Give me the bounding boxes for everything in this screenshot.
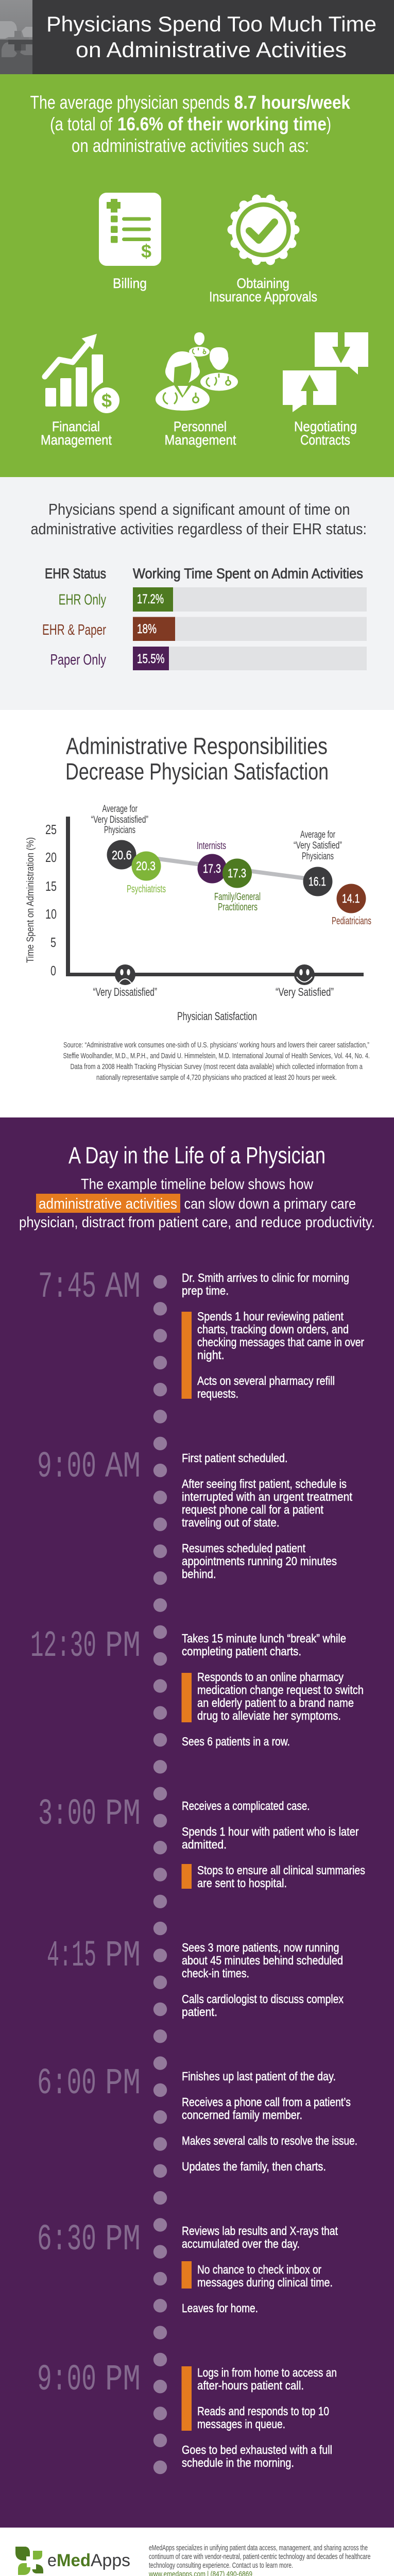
timeline entry: 7:45 AM: checking messages that came in over (197, 1335, 364, 1349)
timeline entry: 6:30 PM: No chance to check inbox or (197, 2263, 321, 2276)
icon: sad face (115, 964, 135, 985)
timeline entry: 9:00 PM: messages in queue. (197, 2417, 285, 2431)
label: financial management (41, 419, 112, 448)
icon: billing: $ (141, 241, 151, 262)
timeline entry: 3:00 PM: are sent to hospital. (197, 1876, 287, 1890)
y axis ticks: 10 (45, 906, 57, 922)
data point: pediatricians 14.1 (332, 884, 371, 927)
company description: technology consulting experience. Contact us to learn more. (149, 2561, 293, 2570)
label: financial management: Management (41, 432, 112, 448)
timeline entry: 6:00 PM: Updates the family, then charts. (182, 2160, 326, 2173)
bar chart: EHR only (59, 587, 367, 612)
y axis ticks: 20 (45, 850, 57, 865)
panel: header (0, 0, 394, 74)
timeline entry: 12:30 PM: Takes 15 minute lunch “break” while (182, 1632, 346, 1645)
scatter chart (25, 804, 371, 1023)
timeline entry: 9:00 PM: Logs in from home to access an (197, 2366, 337, 2379)
timeline entry: 9:00 PM: schedule in the morning. (182, 2456, 294, 2469)
timeline entry: 12:30 PM: Sees 6 patients in a row. (182, 1735, 290, 1748)
timeline entry: 7:45 AM: Dr. Smith arrives to clinic for morning (182, 1271, 349, 1284)
timeline entry: 7:45 AM: charts, tracking down orders, and (197, 1323, 349, 1336)
heading: A Day in the Life of a Physician (68, 1142, 326, 1168)
timeline entry: 4:15 PM (47, 1936, 344, 2019)
intro text: 16.6% of their working time (117, 113, 327, 134)
timeline entry: 7:45 AM: requests. (197, 1387, 238, 1400)
panel: physician satisfaction (0, 710, 394, 1117)
timeline entry: 9:00 AM: First patient scheduled. (182, 1451, 287, 1465)
timeline entry: 3:00 PM: Receives a complicated case. (182, 1799, 310, 1812)
icon: financial management: $ (101, 390, 112, 411)
heading: Decrease Physician Satisfaction (65, 758, 329, 785)
timeline entry: 3:00 PM: Spends 1 hour with patient who is later (182, 1825, 359, 1838)
timeline entry: 4:15 PM: about 45 minutes behind scheduled (182, 1954, 343, 1967)
label: obtaining insurance approvals: Insurance Approvals (209, 289, 317, 304)
timeline entry: 3:00 PM: admitted. (182, 1838, 227, 1851)
average label: very satisfied: Physicians (302, 851, 334, 862)
timeline entry: 6:00 PM (37, 2063, 357, 2173)
intro text: can slow down a primary care (184, 1196, 356, 1212)
intro text: on administrative activities such as: (72, 135, 309, 156)
average label: very satisfied: “Very Satisfied” (294, 840, 342, 851)
data point: 20.6 (107, 840, 136, 870)
timeline entry: 4:15 PM: PM (105, 1936, 141, 1977)
label: billing: Billing (113, 276, 147, 291)
column headers: EHR Status (45, 566, 106, 581)
timeline entry: 7:45 AM: night. (197, 1348, 225, 1362)
data point: pediatricians 14.1: Pediatricians (332, 916, 371, 927)
timeline entry: 9:00 PM: after-hours patient call. (197, 2379, 304, 2392)
y axis ticks (45, 822, 57, 978)
logo: Med (57, 2551, 91, 2570)
data point: family practitioners 17.3: Family/General (214, 891, 261, 903)
logo: Apps (91, 2551, 130, 2570)
timeline entry: 4:15 PM: patient. (182, 2005, 217, 2019)
y axis ticks: 15 (45, 878, 57, 894)
label: personnel management: Personnel (174, 419, 227, 434)
timeline entry: 12:30 PM: completing patient charts. (182, 1645, 301, 1658)
average label: very dissatisfied: “Very Dissatisfied” (91, 815, 148, 825)
timeline entry: 7:45 AM: Acts on several pharmacy refill (197, 1374, 335, 1387)
data point: family practitioners 17.3: 17.3 (228, 867, 246, 880)
intro text: The average physician spends (30, 92, 230, 113)
logo: e (47, 2551, 57, 2570)
data point: 20.6: 20.6 (112, 849, 132, 862)
timeline entry: 9:00 AM: appointments running 20 minutes (182, 1554, 337, 1568)
company description (149, 2544, 371, 2570)
timeline entry: 4:15 PM: Sees 3 more patients, now running (182, 1941, 339, 1954)
label: negotiating contracts: Negotiating (294, 419, 357, 434)
timeline entry: 6:30 PM: Reviews lab results and X-rays that (182, 2224, 338, 2238)
timeline entry: 9:00 AM (37, 1447, 353, 1581)
heading: Administrative Responsibilities (66, 733, 328, 759)
bar chart: EHR only: 17.2% (137, 592, 164, 606)
data point: internists 17.3: 17.3 (203, 862, 221, 876)
label: personnel management: Management (165, 432, 236, 448)
timeline entry: 9:00 AM: request phone call for a patient (182, 1503, 324, 1516)
timeline entry: 12:30 PM: medication change request to switch (197, 1683, 364, 1697)
timeline entry: 3:00 PM: 3:00 (38, 1794, 96, 1835)
average label: very satisfied: Average for (300, 829, 335, 840)
column headers (45, 566, 363, 581)
timeline entry: 6:00 PM: 6:00 (37, 2063, 96, 2105)
x axis labels: “Very Dissatisfied” (93, 986, 157, 998)
trend line (146, 857, 318, 880)
intro text: The example timeline below shows how (81, 1176, 314, 1193)
timeline entry: 3:00 PM (38, 1794, 365, 1890)
bar chart: paper only (50, 647, 367, 670)
column headers: Working Time Spent on Admin Activities (133, 566, 363, 581)
intro text: ) (327, 113, 331, 134)
icon: financial management (45, 334, 119, 413)
y axis ticks: 25 (45, 822, 57, 837)
label: obtaining insurance approvals: Obtaining (237, 276, 289, 291)
timeline entry: 9:00 AM: After seeing first patient, schedule is (182, 1477, 347, 1490)
bar chart: EHR only: EHR Only (59, 592, 106, 608)
data point: internists 17.3 (197, 840, 227, 883)
timeline entry: 6:30 PM: messages during clinical time. (197, 2276, 333, 2289)
data point: psychiatrists 20.3: 20.3 (136, 859, 156, 873)
label: negotiating contracts: Contracts (300, 432, 350, 448)
bar chart: paper only: 15.5% (137, 652, 165, 666)
y axis ticks: 0 (50, 963, 56, 978)
panel: footer (0, 2528, 394, 2576)
panel: EHR status comparison (0, 477, 394, 710)
intro text (30, 92, 351, 156)
title: on Administrative Activities (76, 38, 347, 62)
data point: 16.1 (303, 867, 333, 896)
timeline entry: 12:30 PM: Responds to an online pharmacy (197, 1670, 344, 1684)
timeline entry: 6:30 PM (37, 2219, 338, 2315)
heading (65, 733, 329, 785)
timeline dots (153, 1275, 167, 2474)
source note (63, 1041, 370, 1082)
timeline entry: 9:00 PM: 9:00 (37, 2360, 96, 2401)
bar chart: EHR and paper: 18% (137, 622, 157, 636)
intro text: (a total of (50, 113, 113, 134)
timeline entry: 6:30 PM: Leaves for home. (182, 2301, 258, 2315)
x axis labels (93, 986, 334, 1023)
timeline entry: 9:00 PM (37, 2360, 337, 2469)
timeline entry: 9:00 AM: traveling out of state. (182, 1516, 279, 1529)
timeline entry: 9:00 AM: 9:00 (37, 1447, 96, 1488)
bar chart: paper only: Paper Only (50, 652, 106, 668)
panel: administrative activities (green) (0, 74, 394, 477)
label: personnel management (165, 419, 236, 448)
timeline entry: 6:00 PM: PM (105, 2063, 141, 2105)
panel: a day in the life (0, 1117, 394, 2528)
timeline entry: 9:00 PM: Reads and responds to top 10 (197, 2404, 329, 2418)
timeline entry: 7:45 AM: AM (105, 1267, 141, 1308)
data point: psychiatrists 20.3: Psychiatrists (127, 884, 166, 895)
data point: 16.1: 16.1 (309, 875, 326, 889)
axes (66, 817, 364, 976)
timeline entry: 6:00 PM: Receives a phone call from a patient’s (182, 2095, 351, 2109)
x axis labels: “Very Satisfied” (276, 986, 334, 998)
data point: internists 17.3: Internists (197, 840, 226, 852)
icon: happy face (294, 964, 315, 985)
timeline entry: 12:30 PM: PM (105, 1626, 141, 1667)
timeline entry: 7:45 AM: Spends 1 hour reviewing patient (197, 1310, 344, 1323)
icon: negotiating contracts (283, 332, 368, 412)
timeline entry: 9:00 PM: Goes to bed exhausted with a full (182, 2443, 332, 2456)
timeline entry: 3:00 PM: Stops to ensure all clinical summaries (197, 1863, 365, 1877)
icon: personnel management (156, 332, 238, 411)
average label: very dissatisfied: Physicians (104, 825, 135, 836)
timeline entry: 9:00 AM: AM (105, 1447, 141, 1488)
timeline entry: 6:30 PM: PM (105, 2219, 141, 2261)
timeline entry: 7:45 AM: prep time. (182, 1284, 229, 1297)
timeline entry: 6:30 PM: accumulated over the day. (182, 2237, 300, 2250)
timeline entry: 4:15 PM: check-in times. (182, 1967, 249, 1980)
data point: psychiatrists 20.3 (127, 851, 166, 895)
label: negotiating contracts (294, 419, 357, 448)
timeline entry: 7:45 AM (38, 1267, 364, 1400)
timeline entry: 6:00 PM: concerned family member. (182, 2108, 302, 2122)
title: Physicians Spend Too Much Time (46, 12, 376, 36)
timeline entry: 6:00 PM: Makes several calls to resolve the issue. (182, 2134, 357, 2147)
section heading: Physicians spend a significant amount of time on (48, 500, 350, 518)
intro text: 8.7 hours/week (234, 92, 351, 113)
label: obtaining insurance approvals (209, 276, 317, 304)
icon: billing (99, 193, 161, 266)
timeline entry: 9:00 AM: Resumes scheduled patient (182, 1541, 306, 1555)
section heading (31, 500, 367, 538)
timeline entry: 4:15 PM: Calls cardiologist to discuss complex (182, 1992, 344, 2006)
bar chart: EHR and paper (42, 617, 367, 641)
timeline entry: 12:30 PM: an elderly patient to a brand name (197, 1696, 354, 1709)
bar chart: EHR and paper: EHR & Paper (42, 622, 106, 638)
timeline entry: 12:30 PM (30, 1626, 364, 1748)
average label: very dissatisfied: Average for (102, 804, 138, 815)
icon: insurance approval badge (232, 198, 296, 262)
data point: family practitioners 17.3 (214, 858, 261, 913)
timeline entry: 12:30 PM: drug to alleviate her symptoms. (197, 1709, 341, 1722)
data point: pediatricians 14.1: 14.1 (342, 892, 359, 906)
y axis title: Time Spent on Administration (%) (25, 837, 36, 963)
data point: family practitioners 17.3: Practitioners (218, 902, 258, 913)
timeline entry: 7:45 AM: 7:45 (38, 1267, 96, 1308)
timeline entry: 9:00 AM: behind. (182, 1567, 216, 1581)
timeline entry: 12:30 PM: 12:30 (30, 1626, 96, 1667)
timeline entry: 6:00 PM: Finishes up last patient of the day. (182, 2070, 336, 2083)
intro text: administrative activities (39, 1196, 177, 1212)
timeline entry: 4:15 PM: 4:15 (47, 1936, 96, 1977)
average label: very satisfied (294, 829, 342, 862)
timeline entry: 9:00 PM: PM (105, 2360, 141, 2401)
title (46, 12, 376, 62)
intro text (19, 1176, 375, 1231)
timeline entry: 3:00 PM: PM (105, 1794, 141, 1835)
logo (15, 2547, 130, 2575)
label: financial management: Financial (52, 419, 100, 434)
average label: very dissatisfied (91, 804, 148, 836)
timeline entry: 6:30 PM: 6:30 (37, 2219, 96, 2261)
logo watermark block (0, 0, 32, 74)
x axis labels: Physician Satisfaction (177, 1010, 257, 1023)
y axis ticks: 5 (50, 935, 56, 950)
timeline entry: 9:00 AM: interrupted with an urgent treatment (182, 1490, 353, 1503)
